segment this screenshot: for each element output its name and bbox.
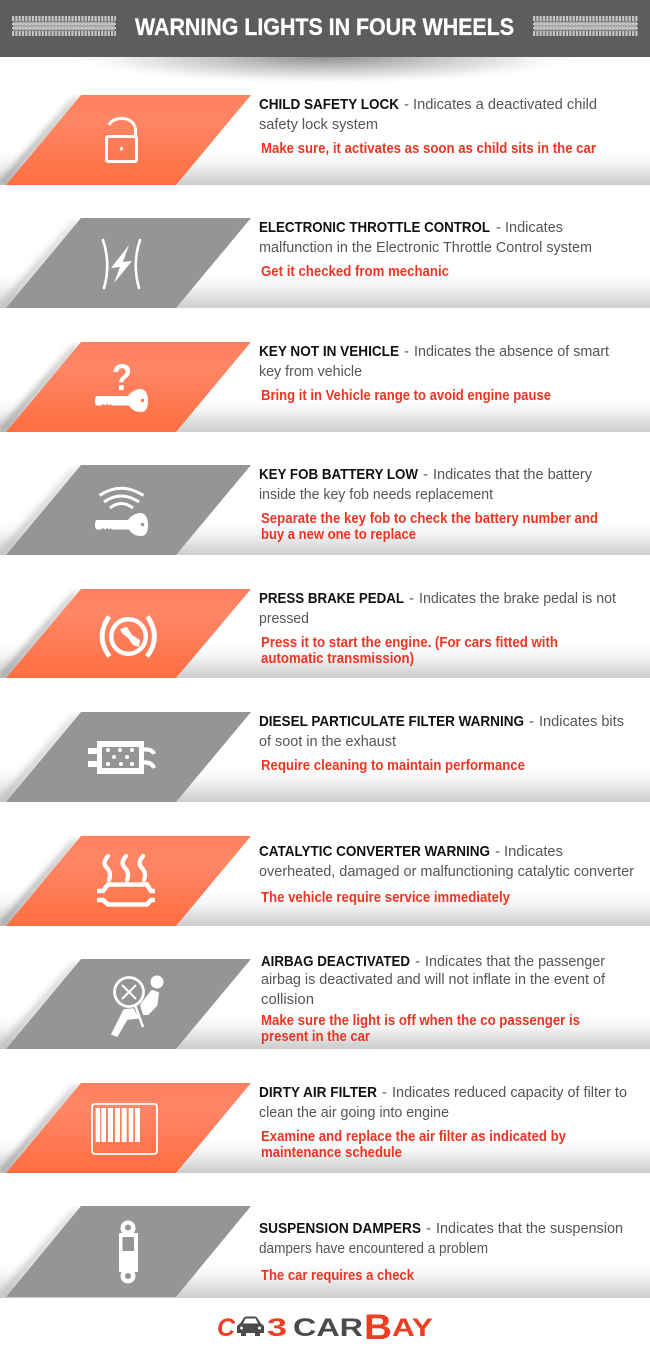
text: child safety lock description: CHILD SAFETY LOCK [259,96,399,113]
panel: airbag deactivated [0,949,650,1059]
icon: right tyre tread [533,18,638,34]
icon: key fob signal [95,488,148,536]
text: airbag action: present in the car [261,1029,370,1045]
banner [6,836,251,926]
text: key not in vehicle action: Bring it in Vehicle range to avoid engine pause [261,388,551,404]
banner [6,589,251,678]
panel: key fob battery low [0,455,650,565]
text: airbag description: collision [261,991,314,1008]
panel: electronic throttle control [0,208,650,318]
text: child safety lock description [259,96,597,133]
banner [6,95,251,185]
text: catalytic converter description [259,843,634,880]
text: airbag action [261,1013,580,1045]
panel: suspension dampers [0,1196,650,1308]
panel: key not in vehicle [0,332,650,442]
banner [6,712,251,802]
text: throttle description: malfunction in the Electronic Throttle Control system [259,239,592,256]
header bar [0,0,650,57]
icon: brake pedal [102,616,154,656]
icon: open padlock [106,118,136,162]
panel: catalytic converter warning [0,826,650,936]
banner [6,218,251,308]
text: key fob description: Indicates that the battery [433,466,592,483]
text: throttle description: - [496,219,501,236]
icon: left tyre tread [12,18,116,34]
text: airbag description: Indicates that the passenger [425,953,605,970]
text: dampers description [259,1220,623,1257]
text: diesel filter description: of soot in the exhaust [259,733,397,750]
title: WARNING LIGHTS IN FOUR WHEELS [135,14,514,41]
icon: question mark key [95,357,148,412]
icon: particulate filter [88,741,154,774]
icon: catalytic converter [97,856,155,904]
text: air filter action [261,1129,567,1161]
text: key fob action: Separate the key fob to check the battery number and [261,511,598,527]
text: key fob description [259,466,592,503]
banner [6,959,251,1049]
icon: question mark key: ? [112,357,132,398]
text: key fob description: inside the key fob needs replacement [259,486,494,503]
text: brake pedal action: automatic transmission) [261,651,414,667]
banner [6,1206,251,1297]
logo: CarBay: C [217,1314,236,1342]
text: catalytic converter description: Indicates [504,843,563,860]
text: diesel filter action: Require cleaning to maintain performance [261,758,525,774]
header shadow [60,29,590,85]
text: airbag description: AIRBAG DEACTIVATED [261,953,410,970]
logo: CarBay: AY [392,1314,433,1342]
logo: CarBay [217,1308,433,1347]
icon: throttle bolt [103,240,140,288]
banner [6,342,251,432]
text: brake pedal description: - [409,590,414,607]
text: dampers action: The car requires a check [261,1268,415,1284]
text: child safety lock description: - [404,96,409,113]
text: throttle description [259,219,592,256]
text: brake pedal description: PRESS BRAKE PEDAL [259,590,404,607]
text: air filter description [259,1084,627,1121]
panel: press brake pedal [0,579,650,688]
text: key fob description: - [423,466,428,483]
text: key not in vehicle description: - [404,343,409,360]
text: air filter description: - [382,1084,387,1101]
text: diesel filter description: Indicates bits [539,713,624,730]
text: airbag description: airbag is deactivated and will not inflate in the event of [261,971,606,988]
text: throttle description: ELECTRONIC THROTTLE CONTROL [259,219,490,236]
text: catalytic converter action: The vehicle require service immediately [261,890,511,906]
text: child safety lock action: Make sure, it activates as soon as child sits in the car [261,141,596,157]
text: child safety lock description: safety lock system [259,116,378,133]
text: key fob action: buy a new one to replace [261,527,416,543]
logo: CarBay: B [364,1308,392,1347]
text: airbag action: Make sure the light is off when the co passenger is [261,1013,580,1029]
text: key not in vehicle description: key from vehicle [259,363,362,380]
text: brake pedal description: pressed [259,610,309,627]
text: airbag description [261,953,606,1008]
text: dampers description: dampers have encountered a problem [259,1240,488,1257]
text: diesel filter description [259,713,624,750]
banner [6,1083,251,1173]
text: dampers description: Indicates that the suspension [436,1220,623,1237]
text: child safety lock description: Indicates a deactivated child [413,96,597,113]
text: brake pedal description [259,590,617,627]
text: diesel filter description: - [529,713,534,730]
icon: car front [237,1316,264,1336]
text: catalytic converter description: - [495,843,500,860]
icon: damper [119,1220,138,1284]
text: throttle action: Get it checked from mechanic [261,264,449,280]
text: air filter action: Examine and replace the air filter as indicated by [261,1129,567,1145]
text: key not in vehicle description: KEY NOT IN VEHICLE [259,343,399,360]
text: key not in vehicle description: Indicates the absence of smart [414,343,610,360]
text: air filter description: DIRTY AIR FILTER [259,1084,377,1101]
text: airbag description: - [415,953,420,970]
text: throttle description: Indicates [505,219,563,236]
banner [6,465,251,555]
panel: child safety lock [0,85,650,195]
text: catalytic converter description: overheated, damaged or malfunctioning catalytic converter [259,863,634,880]
text: air filter description: clean the air going into engine [259,1104,449,1121]
panel: dirty air filter [0,1073,650,1183]
icon: airbag [112,976,164,1036]
text: brake pedal action: Press it to start the engine. (For cars fitted with [261,635,558,651]
panel: diesel particulate filter warning [0,702,650,812]
text: catalytic converter description: CATALYTIC CONVERTER WARNING [259,843,490,860]
logo: CarBay: CAR [293,1314,363,1342]
icon: air filter [92,1104,157,1154]
text: air filter action: maintenance schedule [261,1145,402,1161]
text: air filter description: Indicates reduced capacity of filter to [392,1084,627,1101]
text: diesel filter description: DIESEL PARTICULATE FILTER WARNING [259,713,524,730]
text: brake pedal description: Indicates the brake pedal is not [419,590,617,607]
text: key fob description: KEY FOB BATTERY LOW [259,466,419,483]
text: brake pedal action [261,635,558,667]
text: dampers description: - [426,1220,431,1237]
text: key fob action [261,511,598,543]
logo: CarBay: 3 [267,1314,287,1342]
text: dampers description: SUSPENSION DAMPERS [259,1220,421,1237]
text: key not in vehicle description [259,343,610,380]
